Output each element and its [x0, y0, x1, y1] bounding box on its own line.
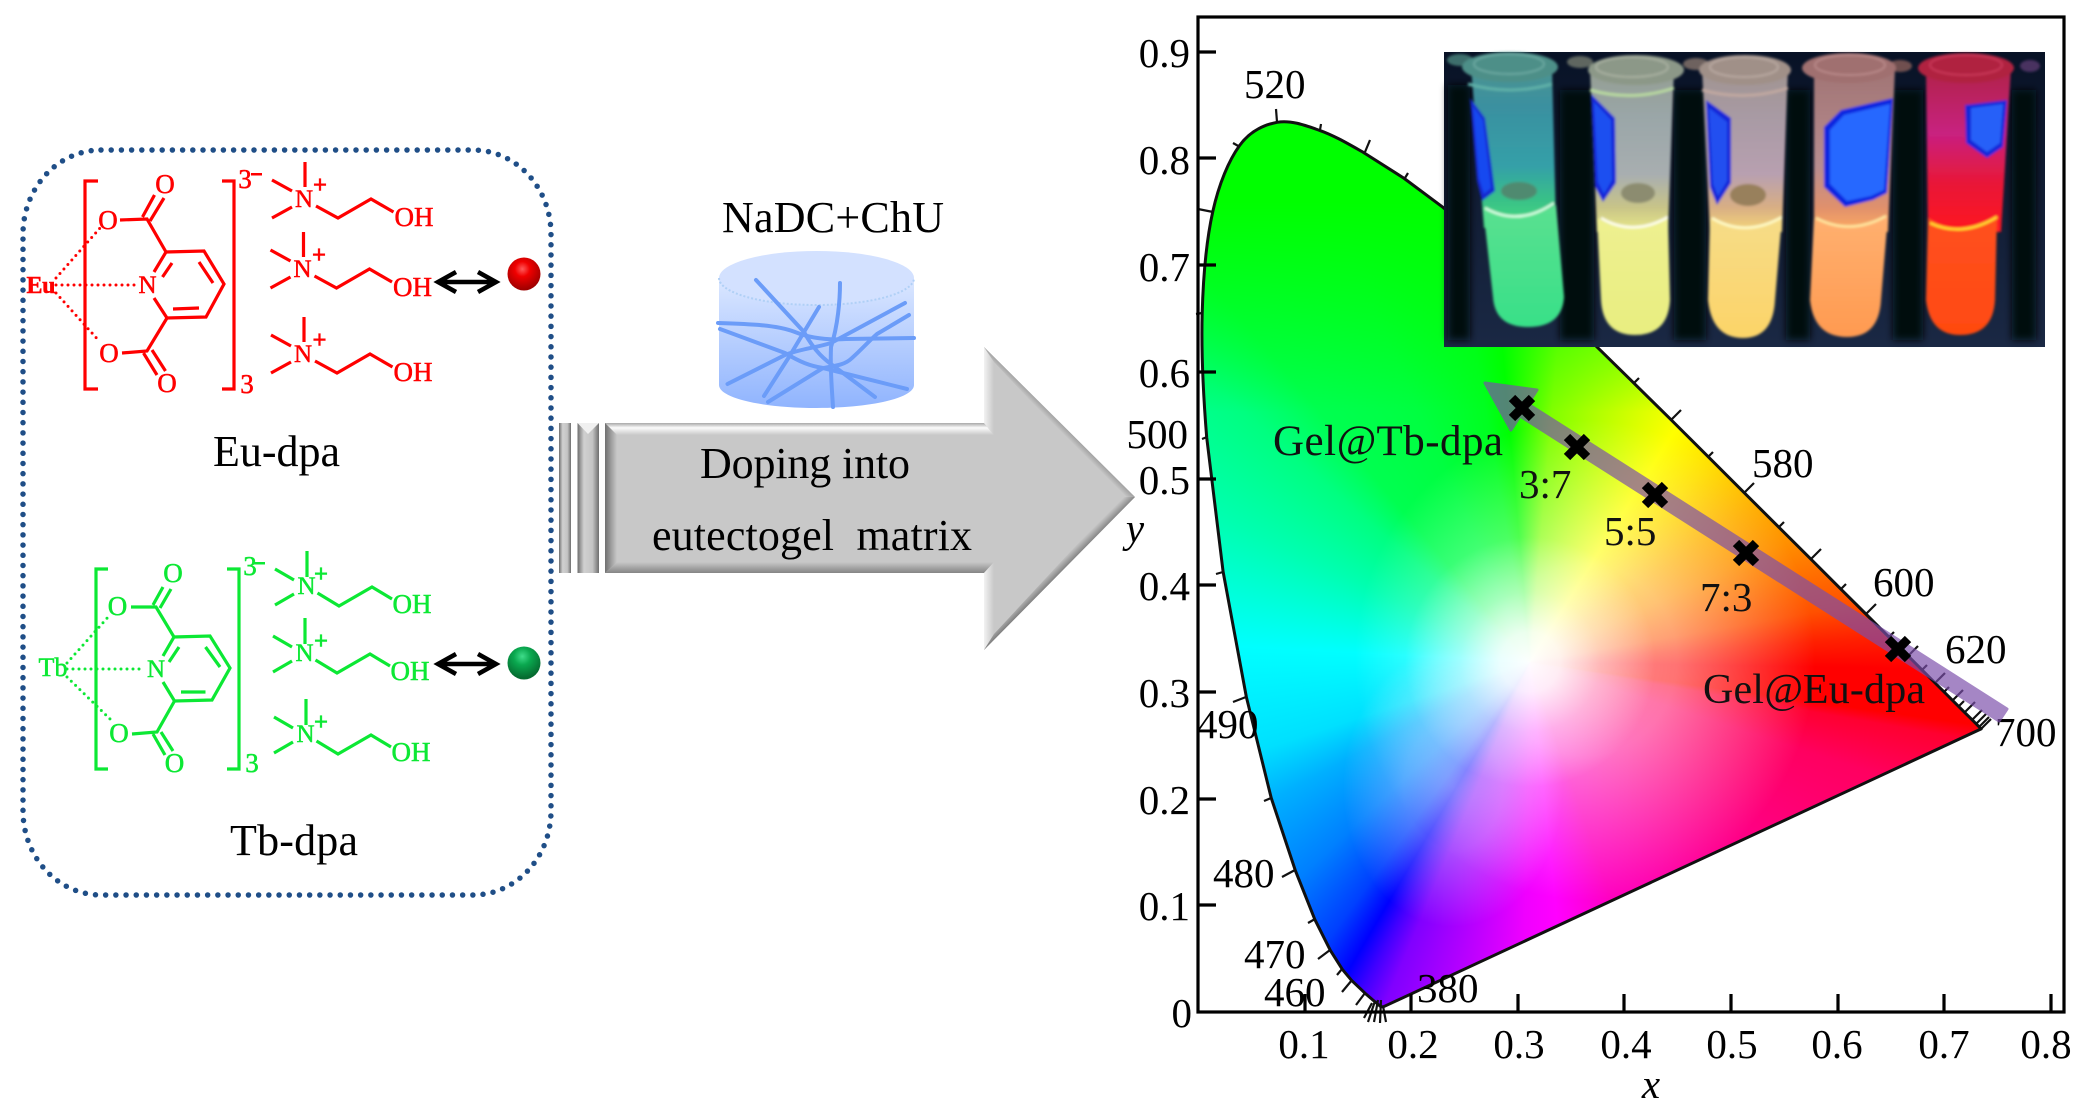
- vial 2 yellow-green: [1567, 55, 1684, 335]
- Eu-dpa atom labels: O: [99, 338, 119, 368]
- Tb-dpa atom labels: +: [314, 628, 328, 655]
- Eu-dpa atom labels: N: [138, 272, 157, 299]
- x axis labels: 0.8: [2020, 1021, 2072, 1067]
- ratio labels: 3:7: [1519, 461, 1571, 507]
- cation 2 Eu: [270, 232, 392, 288]
- label Gel@Tb-dpa: Gel@Tb-dpa: [1273, 418, 1503, 465]
- coordination dotted bonds Tb: [67, 616, 145, 720]
- cation 3 Tb: [274, 699, 391, 754]
- Eu-dpa atom labels: N: [294, 341, 312, 368]
- icon: gel cylinder with fibers: [718, 251, 914, 408]
- Eu-dpa atom labels: OH: [394, 202, 434, 232]
- x axis labels: 0.6: [1811, 1021, 1863, 1067]
- Tb-dpa atom labels: Tb: [38, 653, 68, 682]
- green sphere: [508, 646, 540, 680]
- x axis labels: 0.3: [1493, 1021, 1545, 1067]
- wavelength labels: 470: [1244, 931, 1306, 977]
- wavelength labels: 700: [1995, 709, 2056, 755]
- wavelength labels: 380: [1417, 965, 1478, 1011]
- y axis labels: 0.3: [1139, 670, 1190, 716]
- Eu-dpa atom labels: 3: [240, 369, 254, 399]
- Tb-dpa atom labels: 3: [243, 551, 257, 581]
- x axis labels: 0.2: [1387, 1021, 1439, 1067]
- Eu-dpa atom labels: [26, 164, 434, 399]
- Tb-dpa atom labels: [38, 551, 432, 778]
- y axis labels: 0.7: [1139, 244, 1190, 290]
- double arrow Eu: [438, 272, 496, 292]
- wavelength ticks: [1196, 109, 1991, 1023]
- Tb-dpa atom labels: O: [108, 591, 127, 621]
- Eu-dpa atom labels: +: [312, 242, 326, 269]
- Tb-dpa atom labels: N: [296, 721, 315, 748]
- Tb-dpa atom labels: OH: [392, 589, 432, 619]
- chromaticity gamut fill: [1198, 112, 1998, 1012]
- Tb-dpa atom labels: O: [163, 558, 183, 588]
- vial 1 green: [1447, 52, 1564, 327]
- y axis labels: 0.8: [1139, 137, 1190, 183]
- wavelength labels: 520: [1244, 61, 1306, 107]
- arrow body: [605, 347, 1135, 650]
- coordination dotted bonds Eu: [56, 228, 136, 342]
- pyridine ring Eu: [154, 251, 224, 318]
- heading NaDC+ChU: NaDC+ChU: [722, 193, 944, 242]
- Eu-dpa structure: [56, 162, 394, 389]
- y axis labels: 0.4: [1139, 563, 1190, 609]
- red sphere: [508, 258, 540, 290]
- brackets Tb: [96, 569, 239, 769]
- double arrow Tb: [438, 654, 496, 674]
- cation 2 Tb: [273, 618, 390, 673]
- ratio labels: [1519, 461, 1752, 620]
- wavelength labels: [1126, 61, 2056, 1015]
- cation 1 Eu: [272, 162, 394, 218]
- panel: lanthanide complexes: [23, 150, 551, 895]
- Tb-dpa atom labels: +: [314, 561, 328, 588]
- y axis labels: 0.1: [1139, 883, 1190, 929]
- label Gel@Eu-dpa: Gel@Eu-dpa: [1703, 667, 1925, 713]
- Eu-dpa atom labels: O: [98, 205, 118, 235]
- vial 3 yellow-orange: [1683, 55, 1791, 338]
- brackets Eu: [85, 181, 234, 389]
- spectral locus outline: [1202, 122, 1981, 1007]
- cation 3 Eu: [271, 317, 392, 373]
- Tb-dpa atom labels: OH: [390, 656, 430, 686]
- vial 5 red: [1918, 53, 2040, 335]
- y axis labels: 0.2: [1139, 777, 1190, 823]
- y axis labels: 0: [1172, 990, 1192, 1036]
- inset photo of five vials: [1444, 52, 2045, 347]
- carboxylates Eu: [120, 195, 167, 375]
- Tb-dpa atom labels: O: [109, 718, 129, 748]
- Tb-dpa atom labels: O: [165, 748, 184, 778]
- Tb-dpa atom labels: N: [147, 656, 165, 683]
- cation 1 Tb: [275, 551, 392, 606]
- Tb-dpa atom labels: 3: [245, 748, 259, 778]
- ratio labels: 7:3: [1700, 574, 1752, 620]
- arrow stripes: [559, 423, 571, 573]
- x axis labels: 0.4: [1600, 1021, 1652, 1067]
- carboxylates Tb: [131, 587, 174, 755]
- vial 4 orange: [1802, 53, 1912, 337]
- pyridine ring Tb: [163, 636, 230, 701]
- Tb-dpa atom labels: +: [314, 709, 328, 736]
- x axis labels: 0.5: [1706, 1021, 1758, 1067]
- Tb-dpa structure: [67, 551, 392, 769]
- label Eu-dpa: Eu-dpa: [213, 427, 340, 476]
- y axis labels: [1139, 30, 1192, 1036]
- Eu-dpa atom labels: +: [313, 172, 327, 199]
- label Tb-dpa: Tb-dpa: [230, 816, 358, 865]
- Eu-dpa atom labels: O: [155, 169, 175, 199]
- x axis labels: 0.1: [1278, 1021, 1330, 1067]
- Eu-dpa atom labels: Eu: [26, 273, 56, 299]
- dotted rounded frame: [23, 150, 551, 895]
- x axis labels: [1278, 1021, 2072, 1067]
- Eu-dpa atom labels: N: [295, 186, 313, 213]
- big grey arrow: eutectogel matrix: [652, 511, 972, 560]
- y axis labels: 0.5: [1139, 457, 1190, 503]
- plot frame and axis ticks: [1198, 17, 2064, 1012]
- panel: CIE chromaticity chart: [1122, 17, 2072, 1102]
- Eu-dpa atom labels: +: [312, 327, 327, 354]
- wavelength labels: 620: [1945, 626, 2006, 672]
- wavelength labels: 500: [1126, 411, 1188, 457]
- data markers: [1512, 398, 1908, 659]
- y axis labels: 0.6: [1139, 350, 1190, 396]
- wavelength labels: 580: [1752, 440, 1814, 486]
- wavelength labels: 600: [1873, 559, 1934, 605]
- wavelength labels: 480: [1213, 850, 1274, 896]
- Eu-dpa atom labels: N: [293, 256, 312, 283]
- Eu-dpa atom labels: OH: [394, 357, 432, 387]
- wavelength labels: 490: [1197, 701, 1258, 747]
- Eu-dpa atom labels: OH: [393, 272, 432, 302]
- wavelength labels: 460: [1264, 969, 1326, 1015]
- arrow text: Doping into: [700, 439, 910, 488]
- trend arrow: [1485, 383, 2007, 721]
- x axis labels: 0.7: [1918, 1021, 1970, 1067]
- Tb-dpa atom labels: OH: [392, 737, 430, 767]
- y axis labels: 0.9: [1139, 30, 1190, 76]
- Eu-dpa atom labels: 3: [238, 164, 252, 194]
- ratio labels: 5:5: [1604, 508, 1656, 554]
- Tb-dpa atom labels: N: [295, 640, 314, 667]
- axis title y: y: [1122, 505, 1145, 551]
- big grey arrow: [559, 347, 1135, 650]
- Tb-dpa atom labels: N: [297, 573, 316, 600]
- Eu-dpa atom labels: O: [157, 368, 177, 398]
